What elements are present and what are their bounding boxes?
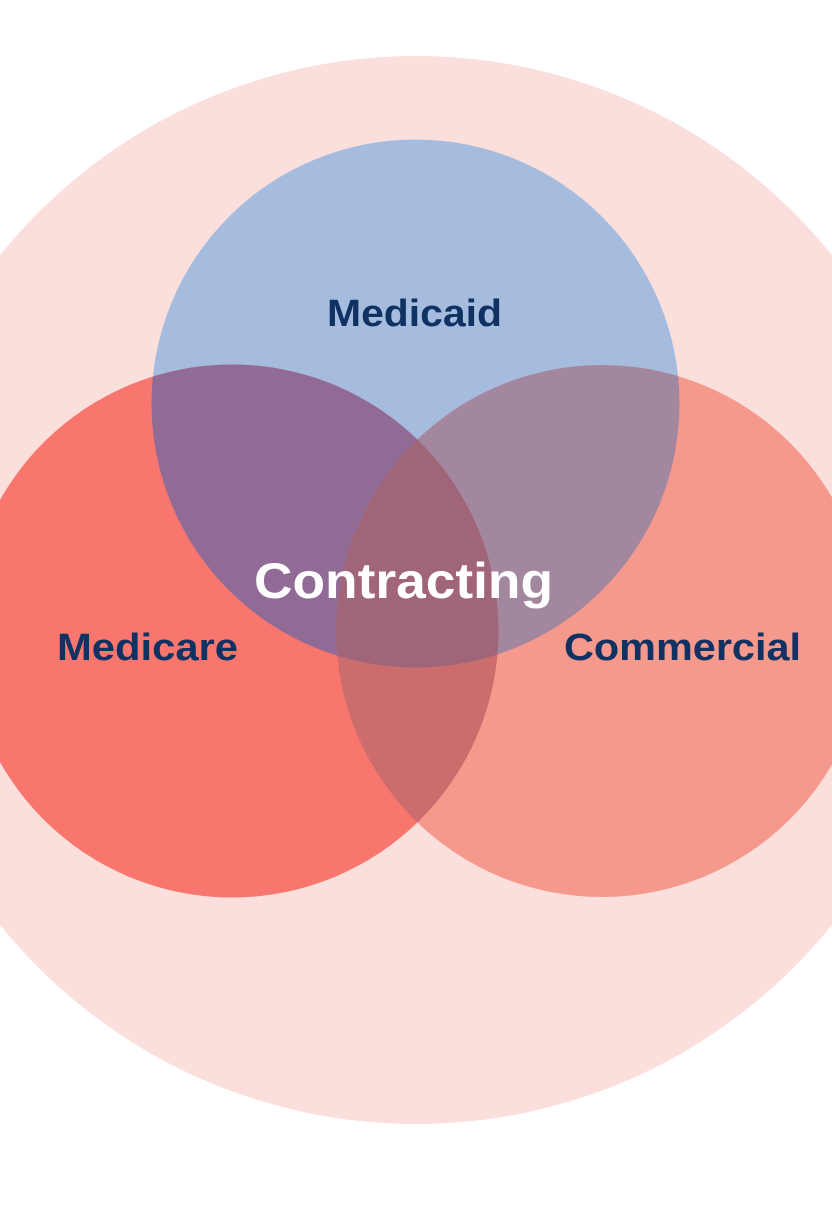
overlap: Medicaid and Commercial [371,365,680,666]
venn diagram [0,140,832,898]
label: Contracting: Contracting [254,553,553,609]
overlap: Medicare and Commercial [337,654,498,822]
circle: Commercial [336,365,832,897]
overlap: center of all three [336,440,498,668]
overlap: Medicaid and Medicare [152,364,496,668]
label: Medicaid: Medicaid [327,293,502,335]
label: Medicare: Medicare [57,627,238,669]
label: Commercial: Commercial [564,627,801,669]
circle: Medicaid [152,140,680,668]
circle: Medicare [0,364,498,898]
